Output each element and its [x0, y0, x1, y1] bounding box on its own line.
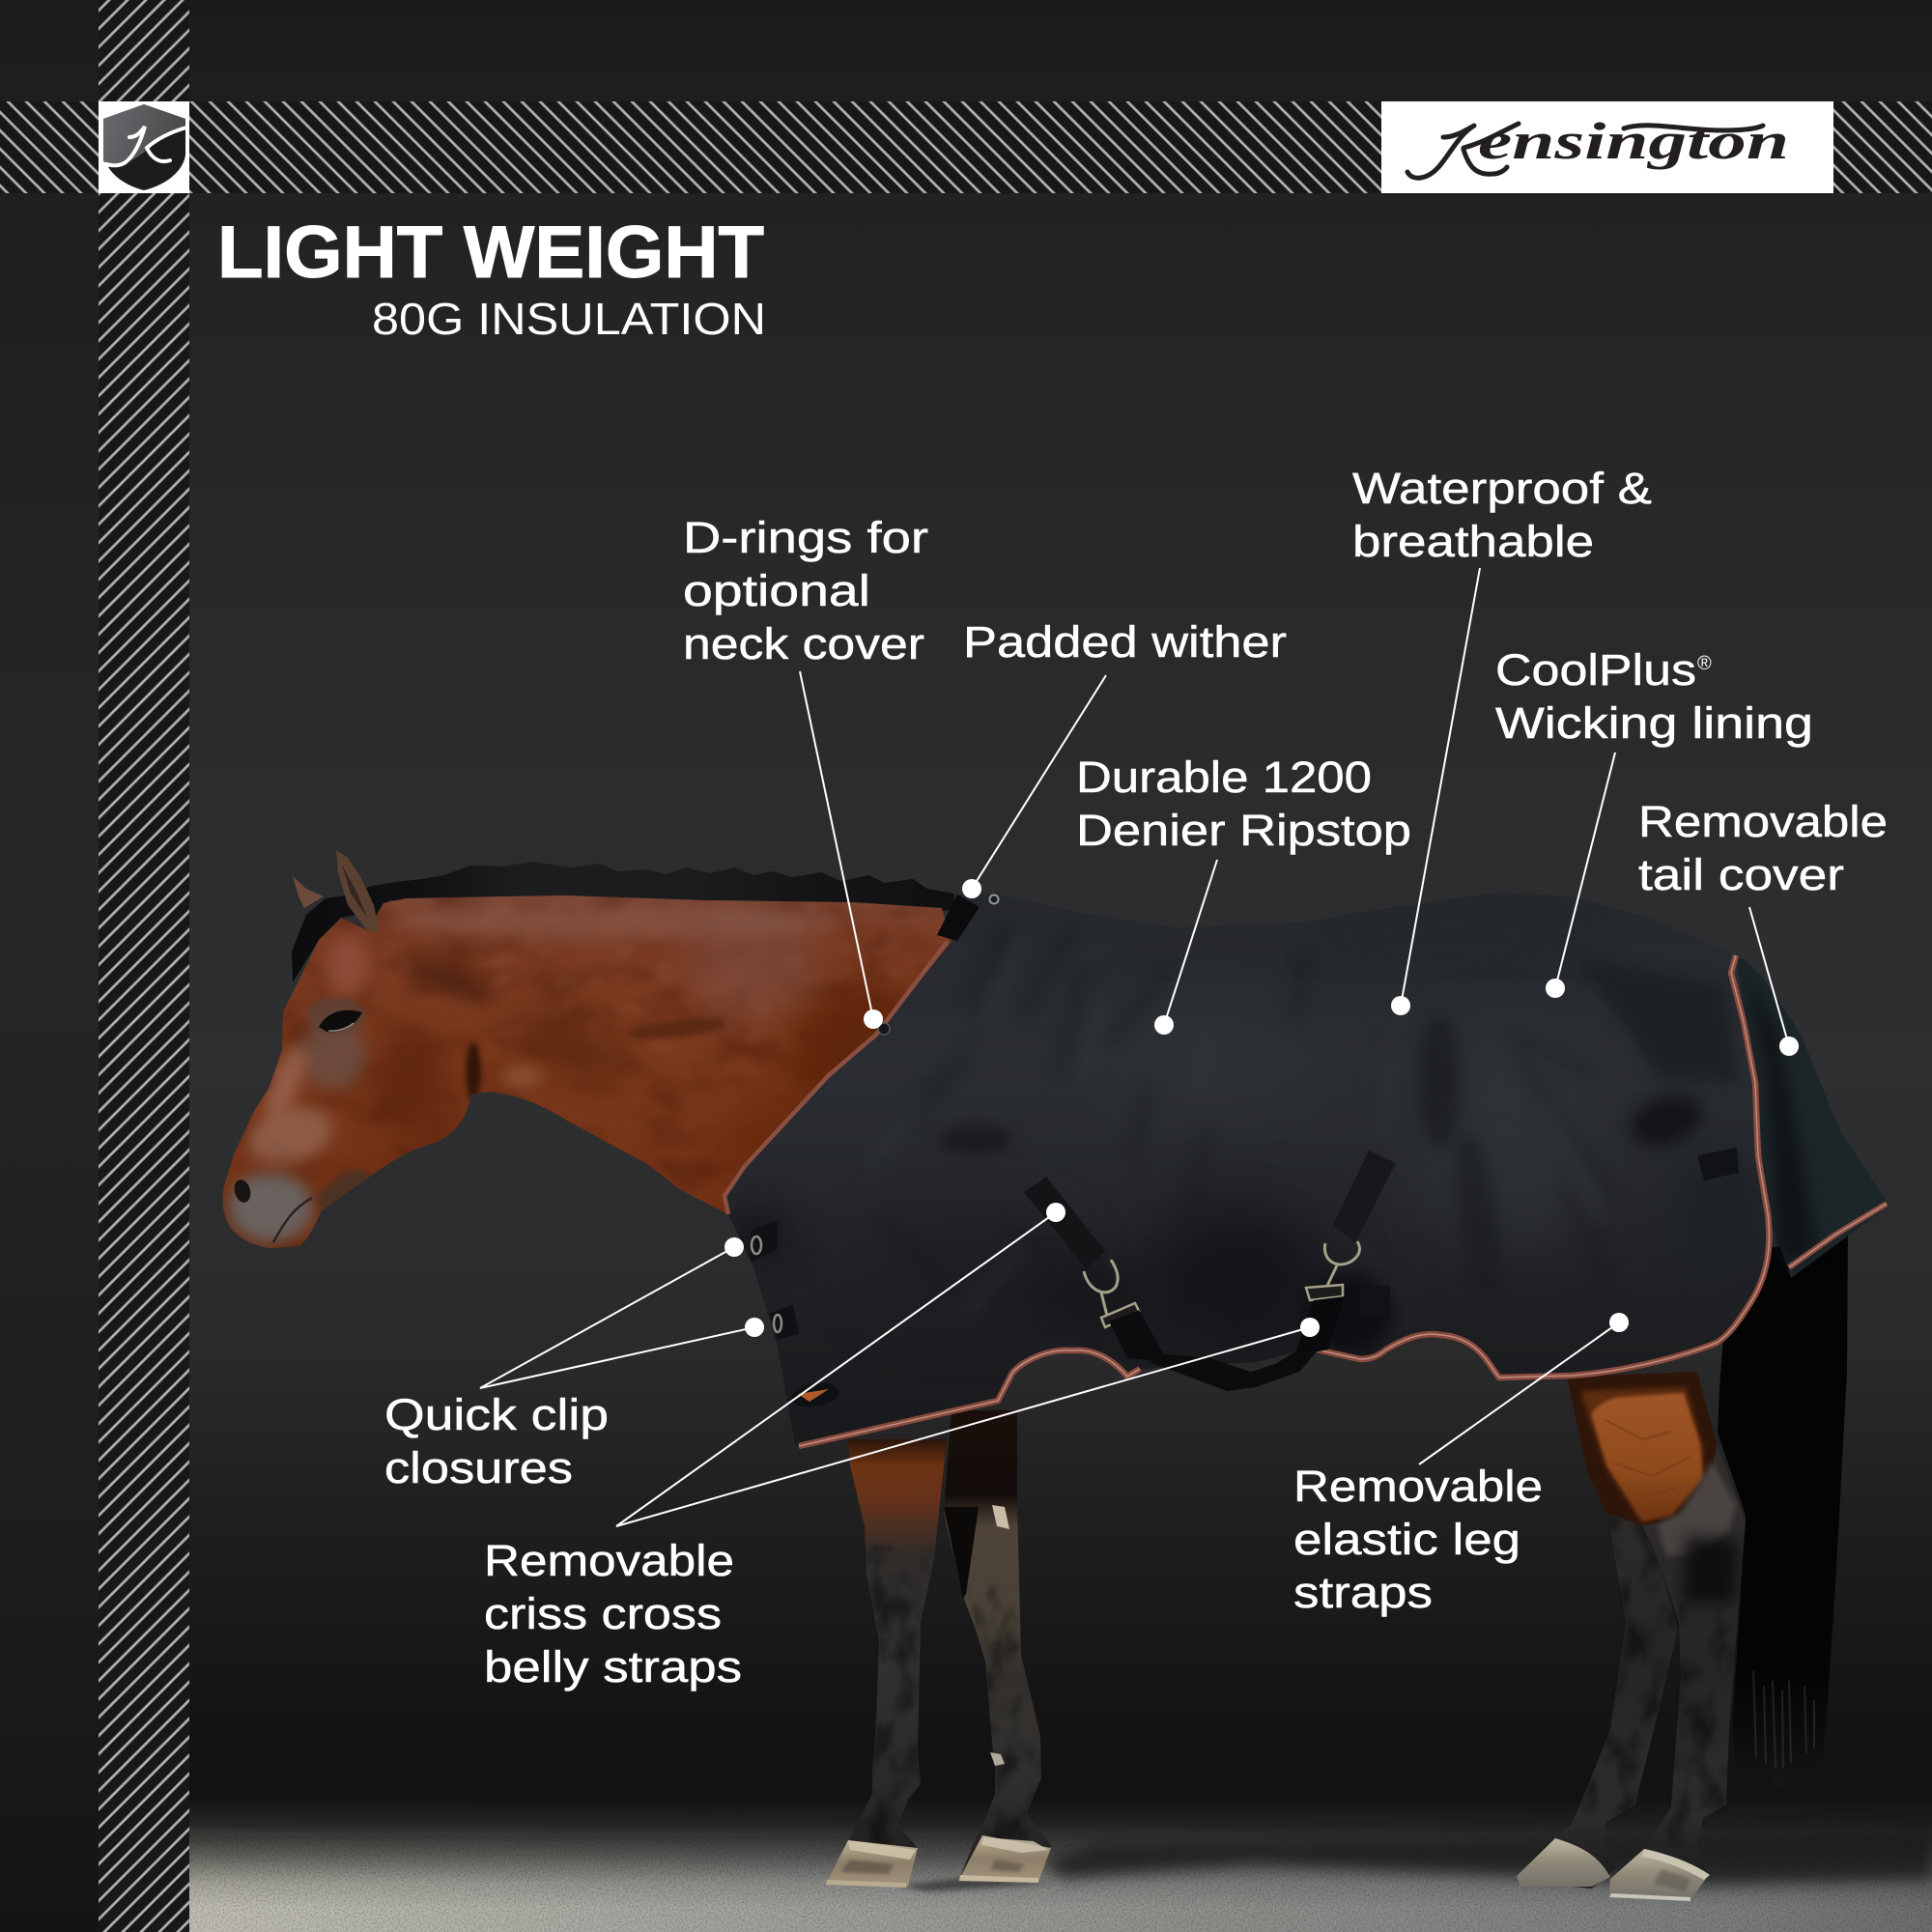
callout: Waterproof: breathable	[1352, 517, 1594, 566]
callout: Removable criss cross belly straps: Removable	[484, 1536, 734, 1585]
callout: Quick clip closures	[384, 1237, 764, 1492]
mouth	[273, 1198, 312, 1242]
rear strap and clip	[1294, 1151, 1396, 1356]
blanket trim: hem	[799, 955, 1769, 1446]
callout: D-rings: D-rings for	[683, 513, 928, 562]
callout: Removable elastic leg straps	[1293, 1313, 1629, 1617]
tail	[1718, 1233, 1848, 1789]
near hind leg	[1567, 1372, 1746, 1901]
callout: Quick clip closures: closures	[384, 1443, 573, 1492]
callout: Padded wither	[962, 617, 1287, 898]
callout: Removable tail cover: Removable	[1638, 797, 1888, 846]
horizontal stripe band	[0, 101, 1932, 193]
callout: Removable criss cross belly straps: belly straps	[484, 1642, 742, 1691]
ground	[189, 1797, 1932, 1932]
horse illustration	[213, 850, 1887, 1901]
callout: Removable criss cross belly straps	[484, 1203, 1320, 1691]
rear pocket tab	[1697, 1148, 1739, 1180]
chest tabs	[751, 1221, 799, 1340]
near ear	[336, 850, 380, 932]
callout: D-rings	[683, 513, 928, 1029]
vertical stripe band	[99, 0, 189, 1932]
callout: Durable 1200	[1076, 753, 1411, 1035]
callout: Waterproof: Waterproof &	[1352, 464, 1652, 513]
callout: Removable elastic leg straps: Removable	[1293, 1462, 1543, 1511]
blanket logo patch	[789, 1379, 841, 1410]
callout: CoolPlus	[1495, 645, 1813, 998]
nostril	[232, 1178, 253, 1205]
mane	[292, 862, 954, 982]
callout: Removable criss cross belly straps: criss cross	[484, 1589, 722, 1638]
far front leg	[944, 1410, 1051, 1883]
front strap and clip	[1024, 1177, 1168, 1362]
callout: Durable 1200: Denier Ripstop	[1076, 806, 1411, 855]
brand logo: Kensington	[1381, 101, 1833, 193]
neck strap	[878, 895, 999, 1035]
callout: Removable elastic leg straps: straps	[1293, 1568, 1433, 1617]
subtitle: 80G INSULATION	[372, 294, 766, 344]
callout: Waterproof	[1352, 464, 1652, 1015]
left panel	[0, 0, 189, 1932]
far ear	[293, 876, 324, 908]
brand logo: Kensington: ensington	[1478, 112, 1789, 170]
tail strands	[1753, 1671, 1814, 1768]
eye	[307, 997, 365, 1036]
callout: Removable elastic leg straps: elastic leg	[1293, 1515, 1520, 1564]
callout: Removable tail cover: tail cover	[1638, 850, 1844, 899]
blanket trim: collar	[724, 941, 948, 1214]
callout: D-rings: optional	[683, 566, 870, 615]
tail cover	[1736, 955, 1887, 1278]
callout: Removable tail cover	[1638, 797, 1888, 1056]
far hind leg	[1517, 1513, 1678, 1889]
callout: Quick clip closures: Quick clip	[384, 1390, 609, 1439]
belly straps	[1150, 1350, 1319, 1391]
callout: CoolPlus: Wicking lining	[1495, 698, 1813, 748]
shield logo icon	[99, 101, 189, 193]
near front leg	[826, 1439, 947, 1888]
blanket body	[724, 893, 1769, 1447]
callout: D-rings: neck cover	[683, 619, 924, 668]
callout: CoolPlus: CoolPlus	[1495, 645, 1696, 695]
callout: CoolPlus: ®	[1697, 653, 1712, 674]
title: LIGHT WEIGHT	[217, 212, 764, 294]
callout: Durable 1200: Durable 1200	[1076, 753, 1372, 802]
callout: Padded wither: Padded wither	[963, 617, 1287, 667]
head and neck	[213, 889, 966, 1256]
